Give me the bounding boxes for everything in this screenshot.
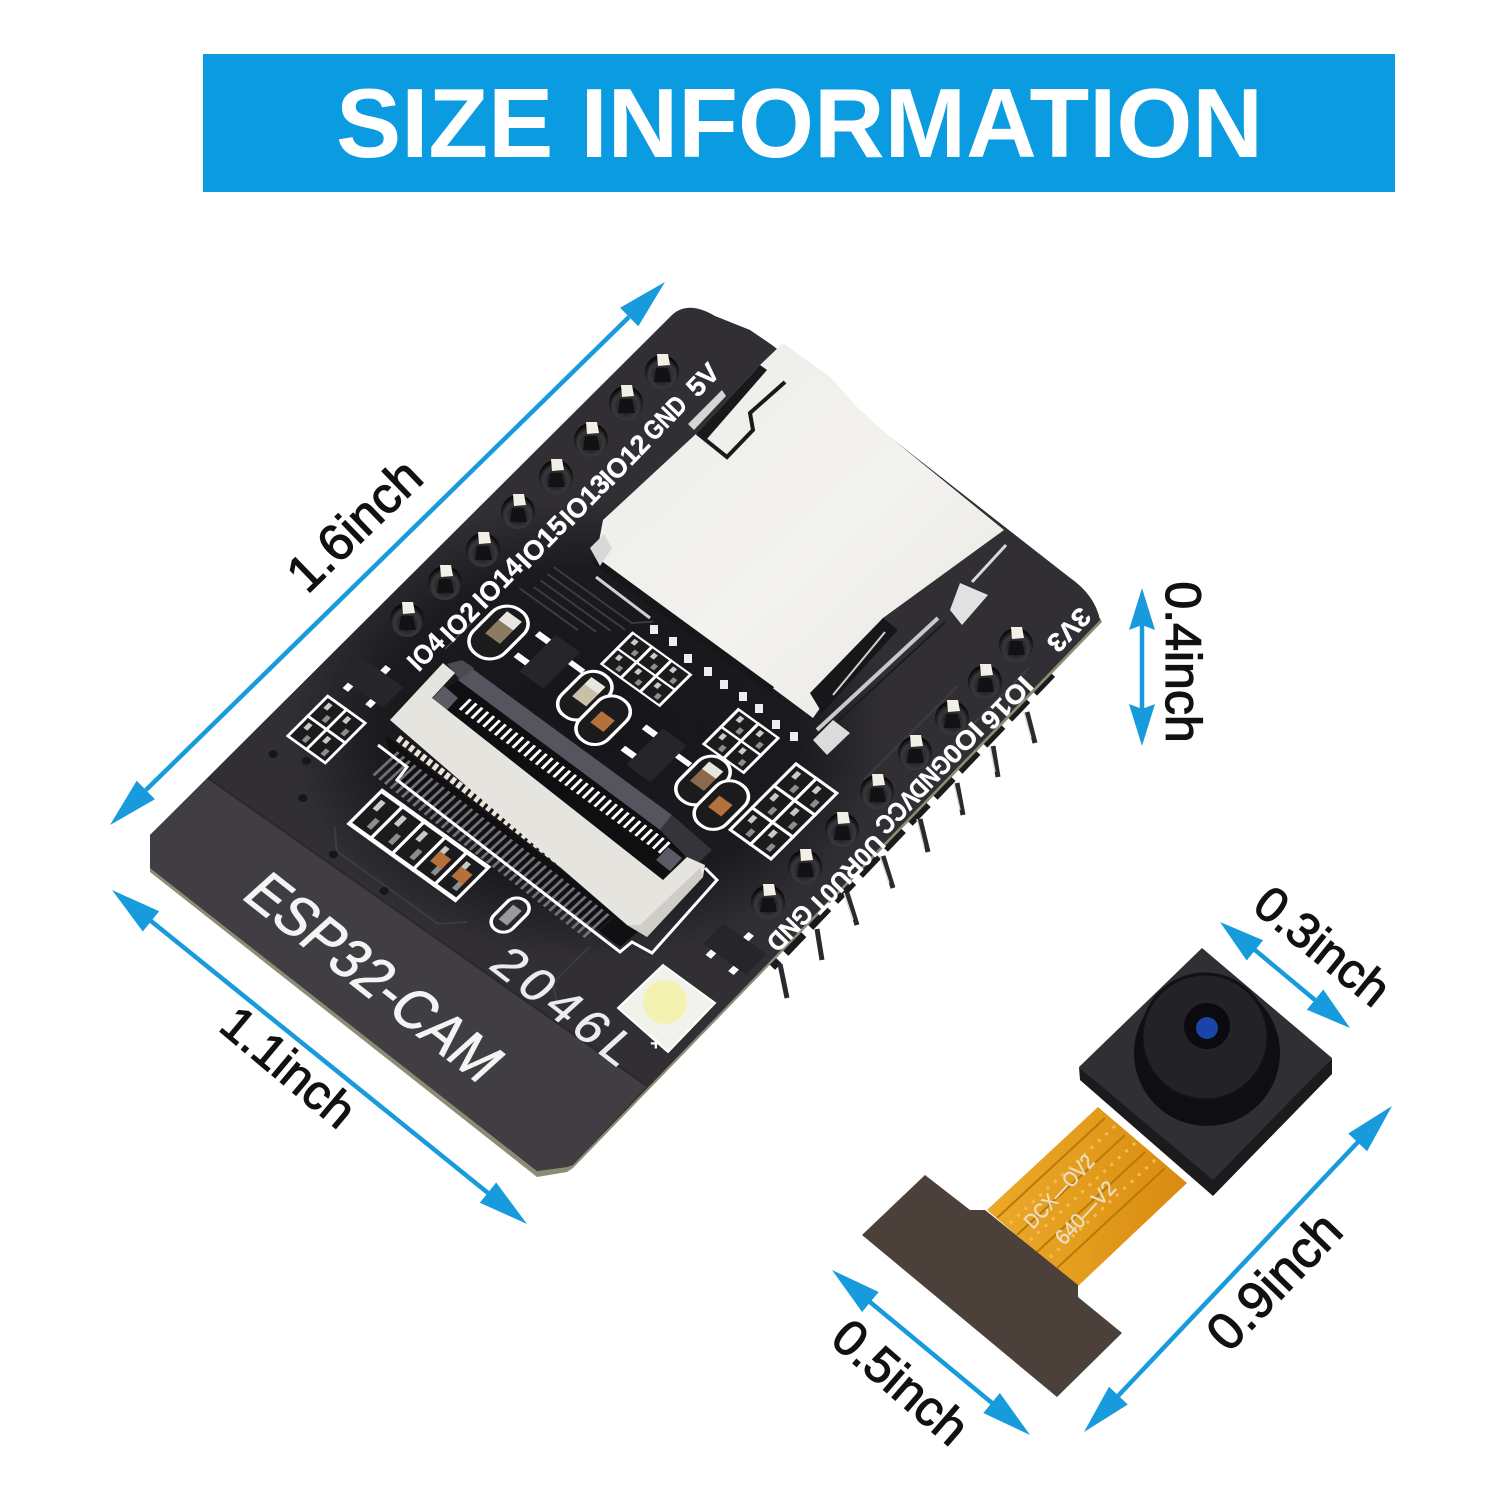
pin labels right row: 3V3 [1041, 602, 1097, 658]
oval pad [486, 894, 534, 936]
dimension arrow: pin block 0.4 inch [1129, 588, 1155, 746]
ESP32-CAM circuit board [150, 308, 1102, 1177]
pin labels left row: IO15 [510, 510, 574, 574]
pin labels left row: IO14 [467, 552, 529, 614]
camera flexible cable: 640—V2 [1051, 1177, 1121, 1249]
pin holes right row [751, 627, 1033, 919]
pin labels right row: IO16 [975, 670, 1039, 736]
flex cable print: DCX—OV2 [1020, 1150, 1099, 1233]
camera flex stiffener [862, 1175, 1122, 1397]
white LED flash [618, 965, 715, 1055]
pin labels right row: GND [760, 898, 820, 958]
camera sensor housing [1079, 948, 1332, 1196]
dimension arrow: lens block 0.3 inch [1220, 922, 1350, 1028]
connector silk outline [378, 745, 717, 953]
pin labels left row [401, 357, 726, 677]
camera FFC connector [378, 660, 717, 953]
lighter lower band [150, 778, 647, 1171]
pin labels right row: IO0 [936, 716, 990, 770]
connector slate housing [458, 667, 672, 830]
board edge thickness [150, 618, 1102, 1177]
dimension arrow: board width 1.1 inch [112, 890, 527, 1224]
dimension arrow: camera length 0.9 inch [1084, 1106, 1392, 1432]
pin labels right row: VCC [869, 784, 925, 841]
pin labels left row: IO2 [435, 596, 485, 648]
pin holes left row [390, 354, 679, 637]
dark central zone [327, 525, 856, 934]
pad grids [263, 532, 845, 1015]
title text: SIZE INFORMATION [336, 68, 1263, 178]
label 1.6inch: 1.6inch [275, 447, 433, 603]
camera module [862, 948, 1332, 1397]
label 1.1inch: 1.1inch [210, 996, 366, 1139]
label 0.5inch: 0.5inch [821, 1308, 980, 1456]
dimension arrow: board length 1.6 inch [110, 282, 665, 825]
band seam line [208, 778, 647, 1086]
card spring slot [810, 618, 898, 713]
camera flexible cable [987, 1107, 1187, 1287]
code print 2046L: 2046L [479, 937, 650, 1075]
card metal strip [817, 618, 938, 730]
camera lens [1134, 974, 1280, 1126]
header pins of the board [770, 672, 1050, 998]
connector upper contact teeth [464, 704, 667, 849]
pin labels left row: GND [637, 390, 693, 446]
label 0.4inch: 0.4inch [1155, 581, 1211, 743]
pin labels right row: U0R [835, 829, 891, 886]
connector black base [432, 677, 690, 880]
pin labels right row [760, 602, 1097, 958]
pin labels left row: IO12 [594, 429, 656, 491]
connector white latch bar [390, 663, 705, 937]
pin labels right row: GND [902, 749, 958, 805]
pin labels left row: IO4 [401, 627, 451, 677]
pin labels right row: U0T [802, 864, 857, 920]
LED polarity marks: + [650, 1033, 662, 1055]
micro SD card slot [590, 343, 1006, 755]
copper traces [279, 416, 1029, 1067]
board surface contents in board-plane coordinates [231, 384, 1043, 1080]
via dots [233, 496, 805, 989]
board name ESP32-CAM: ESP32-CAM [230, 861, 518, 1093]
pin labels left row: IO13 [554, 469, 616, 531]
capacitor pills [455, 599, 765, 835]
pin labels left row: 5V [680, 357, 726, 403]
title banner [203, 54, 1395, 192]
card side components [950, 583, 988, 625]
small pads row beside card [650, 625, 798, 741]
label 0.3inch: 0.3inch [1244, 876, 1400, 1017]
PCB base [150, 308, 1100, 1171]
dimension arrow: stiffener width 0.5 inch [832, 1270, 1030, 1435]
label 0.9inch: 0.9inch [1196, 1201, 1354, 1362]
transistor chips [331, 562, 864, 980]
connector lower contact zone [385, 735, 640, 947]
